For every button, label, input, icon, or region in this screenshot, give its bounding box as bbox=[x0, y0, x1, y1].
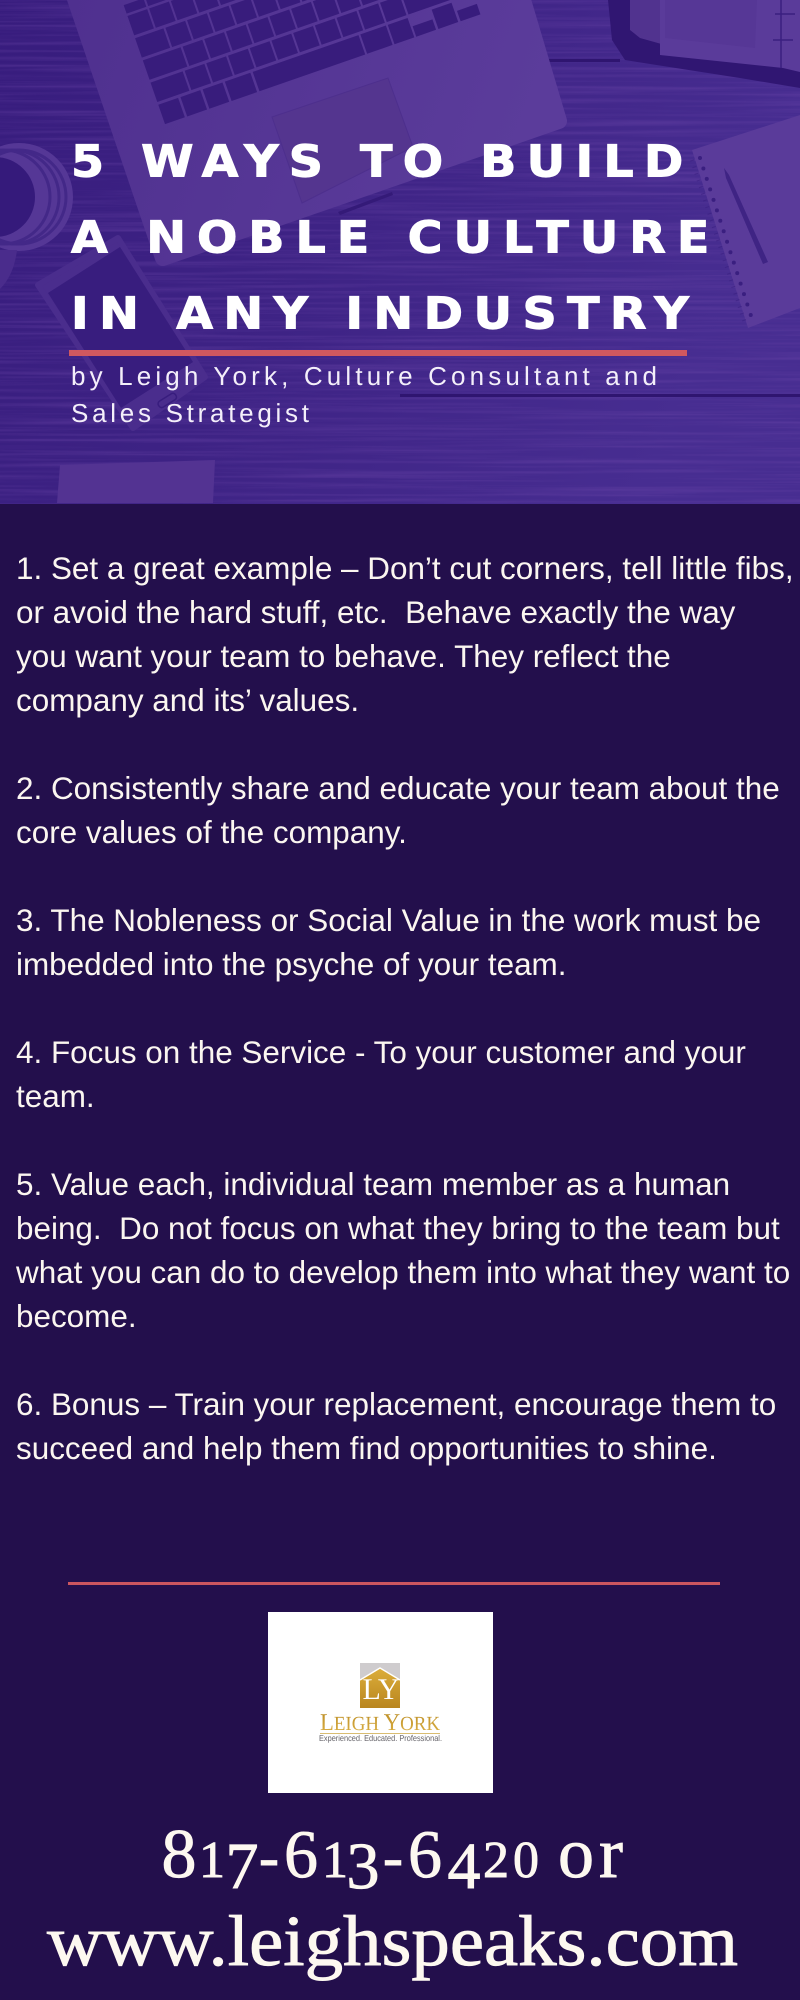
item 6: 6. Bonus – Train your replacement, encourage them to succeed and help them find opportunities to shine. bbox=[16, 1387, 776, 1466]
contact phone: r bbox=[599, 1813, 623, 1893]
body text: numbered list bbox=[16, 551, 794, 1466]
contact phone: 8 bbox=[162, 1816, 196, 1893]
hero banner bbox=[0, 0, 800, 504]
item 2: 2. Consistently share and educate your team about the core values of the company. bbox=[16, 771, 780, 850]
footer bbox=[46, 1582, 738, 1981]
pen bbox=[724, 168, 768, 264]
contact phone: - bbox=[383, 1824, 403, 1890]
title: A NOBLE CULTURE bbox=[71, 212, 709, 264]
trackpad bbox=[272, 78, 413, 203]
byline: by Leigh York, Culture Consultant and bbox=[71, 361, 657, 391]
title: 5 WAYS TO BUILD bbox=[71, 136, 683, 188]
contact phone: 0 bbox=[513, 1832, 539, 1889]
desk background bbox=[0, 0, 800, 504]
contact phone: 7 bbox=[226, 1830, 258, 1903]
logo tagline: Experienced. Educated. Professional. bbox=[319, 1733, 442, 1743]
spiral notepad bbox=[692, 115, 800, 328]
contact phone: 6 bbox=[408, 1816, 442, 1892]
contact phone: o bbox=[558, 1813, 594, 1893]
contact phone: - bbox=[259, 1824, 279, 1890]
contact phone: 1 bbox=[199, 1832, 225, 1889]
title bbox=[71, 136, 709, 340]
keyboard bbox=[124, 0, 480, 124]
wood grain bbox=[0, 0, 800, 504]
byline: Sales Strategist bbox=[71, 398, 310, 428]
item 4: 4. Focus on the Service - To your customer and your team. bbox=[16, 1035, 746, 1114]
title: IN ANY INDUSTRY bbox=[71, 288, 690, 340]
coffee mug bbox=[0, 143, 73, 289]
laptop front notch bbox=[338, 192, 393, 215]
planner at top right bbox=[608, 0, 800, 88]
contact phone: 6 bbox=[284, 1816, 318, 1892]
logo mark bbox=[360, 1663, 400, 1708]
title underline bbox=[69, 350, 687, 356]
item 3: 3. The Nobleness or Social Value in the work must be imbedded into the psyche of your team. bbox=[16, 903, 761, 982]
item 1: 1. Set a great example – Don’t cut corners, tell little fibs, or avoid the hard stuff, etc. Behave exactly the way you want your team to behave. They reflect the company and its’ values. bbox=[16, 551, 794, 718]
contact phone: 1 bbox=[322, 1832, 348, 1889]
contact phone: 4 bbox=[448, 1830, 480, 1903]
smartphone bbox=[38, 238, 205, 428]
sticky note bbox=[57, 460, 215, 503]
footer divider bbox=[68, 1582, 720, 1585]
desk plank gaps bbox=[400, 59, 800, 397]
contact website: www.leighspeaks.com bbox=[47, 1901, 738, 1981]
laptop bbox=[72, 0, 559, 258]
logo mark: LY bbox=[362, 1673, 400, 1706]
logo card bbox=[268, 1612, 493, 1793]
item 5: 5. Value each, individual team member as a human being. Do not focus on what they bring to the team but what you can do to develop them into what they want to become. bbox=[16, 1167, 790, 1334]
logo name: LEIGH YORK bbox=[320, 1710, 441, 1736]
contact phone: 3 bbox=[346, 1830, 380, 1903]
byline bbox=[71, 361, 657, 428]
contact phone: 2 bbox=[483, 1832, 509, 1889]
